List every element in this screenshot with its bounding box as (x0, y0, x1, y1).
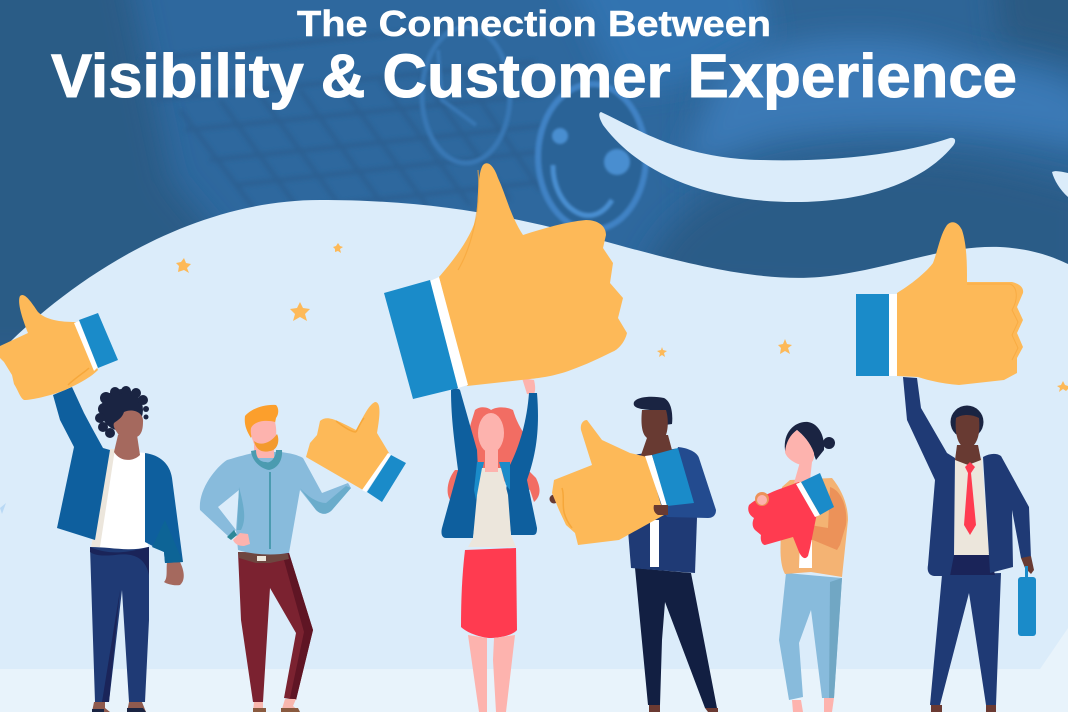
feet (792, 698, 834, 712)
hand (439, 163, 627, 386)
cuff (367, 455, 406, 502)
shoes (253, 699, 300, 712)
hair (634, 397, 672, 425)
large central thumbs up (384, 163, 627, 399)
white cuff strip (74, 321, 98, 371)
feet (649, 705, 718, 712)
jacket (441, 388, 538, 538)
hand (164, 562, 184, 585)
suit (903, 377, 955, 576)
tie (964, 462, 976, 535)
cuff (856, 294, 889, 376)
arms raised hands (522, 378, 535, 394)
face (114, 410, 143, 438)
face (785, 430, 814, 465)
jacket (780, 478, 848, 577)
neck and face (485, 450, 498, 472)
title line two: Visibility & Customer Experience (51, 42, 1017, 110)
decorative stars (176, 243, 1068, 392)
feet (92, 702, 146, 712)
hand (233, 533, 250, 546)
neck (955, 445, 981, 465)
hand (306, 402, 389, 490)
top (468, 468, 516, 547)
feet (931, 705, 996, 712)
thumb hand (552, 420, 664, 545)
person 2 with ginger beard (200, 405, 351, 712)
blurred photo background: keyboard, hand and smiley (0, 0, 1068, 360)
head hair (950, 406, 984, 438)
skirt (461, 548, 517, 638)
orange arm (808, 487, 846, 550)
belt shadow (942, 553, 995, 575)
white cuff strip (889, 294, 897, 376)
holding hand (755, 492, 769, 506)
holding hand (654, 505, 668, 515)
thumbs up hand held by person 2 (306, 402, 406, 502)
neck (640, 435, 672, 458)
hand (1021, 556, 1034, 574)
person 5 holding thumbs down (748, 422, 848, 712)
thumbs up held by person 6 (856, 222, 1023, 385)
sleeve (660, 447, 716, 518)
woman with red hair (441, 378, 540, 712)
pants (930, 573, 1001, 705)
face (956, 415, 979, 448)
title (51, 3, 1017, 110)
cuff (384, 280, 458, 399)
light hill background (0, 200, 1068, 712)
face (641, 410, 668, 441)
hair (448, 407, 540, 502)
white cuff strip (362, 453, 391, 492)
shirt body and arms (200, 452, 351, 554)
jacket (53, 387, 110, 540)
white cuff strip (430, 277, 468, 388)
neck (794, 462, 812, 483)
person 1 with afro hair (53, 386, 184, 712)
belt (238, 552, 289, 563)
cuff (796, 482, 820, 517)
white shirt (799, 540, 812, 568)
white shirt strip (650, 520, 659, 567)
hand (897, 222, 1023, 385)
briefcase (1018, 566, 1036, 636)
inner lining (474, 462, 510, 500)
legs (468, 635, 515, 712)
collar (251, 450, 282, 470)
hair (245, 405, 278, 438)
hair and bun (785, 422, 835, 460)
white swoosh crescent (599, 112, 955, 202)
thumbs up hand held by person 1 (0, 295, 118, 400)
neck (254, 440, 274, 458)
pants (635, 568, 717, 708)
pants (779, 573, 842, 700)
cuff (652, 448, 694, 506)
title line one: The Connection Between (297, 3, 771, 44)
white swoosh fragment at right edge (1052, 171, 1068, 197)
thumbs down (748, 482, 817, 558)
shirt (91, 449, 148, 549)
smiley emoji circle (538, 84, 646, 230)
person 6 in suit with briefcase (903, 377, 1036, 712)
cuff (227, 530, 237, 540)
neutral emoji circle (422, 27, 510, 163)
shirt (954, 458, 989, 555)
afro hair (95, 386, 149, 438)
hand (0, 295, 98, 400)
pants (238, 552, 313, 702)
neck (114, 435, 140, 460)
person 4 holding thumbs up (550, 397, 718, 712)
beard (254, 434, 278, 452)
pants (90, 547, 149, 702)
jacket (628, 448, 697, 573)
floor band (0, 669, 1068, 712)
cuff (79, 313, 118, 368)
white cuff strip (645, 455, 668, 506)
hand behind (550, 494, 558, 504)
face (251, 421, 276, 450)
keyboard keys (140, 20, 560, 230)
